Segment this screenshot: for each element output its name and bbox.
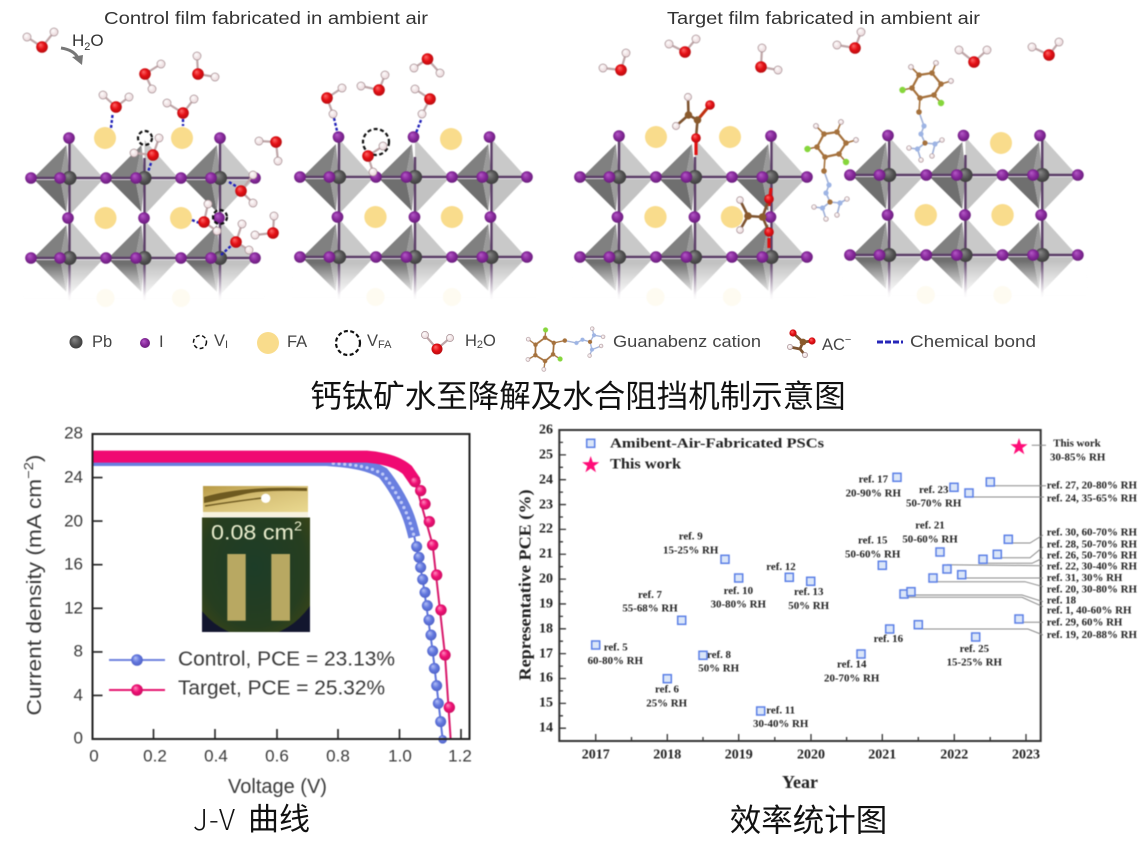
- y axis labels: 26: [539, 422, 553, 438]
- x axis labels: 2023: [1012, 748, 1040, 762]
- panel: target film lattice right: [833, 28, 1088, 304]
- x axis labels: 0.2: [143, 746, 167, 766]
- point labels: 30-80% RH: [711, 599, 767, 611]
- y axis labels: 25: [539, 448, 553, 462]
- legend: water: H: [465, 332, 477, 350]
- y axis labels: 24: [539, 472, 553, 488]
- point labels: 50-60% RH: [902, 533, 958, 545]
- x axis labels: 1.2: [448, 746, 472, 766]
- x axis labels: 0.6: [265, 746, 289, 766]
- heading: control film: Control film fabricated in ambient air: [104, 8, 428, 28]
- leader lines: [904, 445, 1046, 635]
- point labels: ref. 19, 20-88% RH: [1047, 629, 1137, 641]
- y axis title: ): [24, 454, 46, 462]
- point labels: 50-70% RH: [906, 498, 962, 510]
- molecule: acetate lower: [737, 188, 774, 248]
- y axis labels: 18: [539, 622, 553, 636]
- x axis title: Voltage (V): [228, 776, 327, 798]
- legend: This work: [610, 456, 682, 472]
- point labels: ref. 13: [794, 586, 824, 598]
- chart: J-V curve: [20, 424, 472, 798]
- point labels: ref. 25: [960, 643, 990, 655]
- legend: FA vacancy: [336, 331, 392, 355]
- data point: this work star: [1010, 438, 1028, 454]
- point labels: 50% RH: [698, 663, 740, 675]
- x axis labels: 0: [89, 746, 99, 766]
- x axis title: Year: [782, 772, 818, 792]
- caption: J-V curve: -: [209, 797, 219, 839]
- legend: Pb: Pb: [92, 333, 112, 351]
- point labels: ref. 10: [724, 585, 754, 597]
- point labels: ref. 31, 30% RH: [1047, 572, 1123, 584]
- curves: control and target: [93, 457, 455, 744]
- legend: water: 2: [477, 339, 483, 351]
- legend: target: Target, PCE = 25.32%: [178, 676, 385, 700]
- y axis title: −2: [20, 462, 36, 479]
- point labels: 60-80% RH: [588, 655, 644, 667]
- point labels: ref. 20, 30-80% RH: [1047, 583, 1137, 595]
- point labels: ref. 28, 50-70% RH: [1047, 538, 1137, 550]
- legend: guanabenz cation: Guanabenz cation: [613, 333, 761, 351]
- caption: J-V curve: V: [219, 797, 235, 839]
- x axis labels: 2022: [940, 748, 968, 762]
- y axis labels: [64, 424, 83, 748]
- y axis labels: 20: [539, 572, 553, 586]
- y axis labels: 16: [64, 554, 83, 574]
- legend: iodide vacancy: V: [214, 332, 225, 350]
- x axis labels: [582, 748, 1040, 762]
- plot frame and ticks: [92, 434, 470, 739]
- caption: J-V curve: J: [193, 797, 208, 839]
- label: H2O with arrow: O: [90, 31, 104, 50]
- x axis labels: 2020: [797, 748, 825, 762]
- title: mechanism schematic: 钙钛矿水至降解及水合阻挡机制示意图: [310, 378, 846, 414]
- y axis title: Current density (mA cm: [24, 507, 46, 716]
- legend: iodide vacancy: [194, 332, 228, 351]
- point labels: 15-25% RH: [663, 545, 719, 557]
- legend: water: O: [483, 332, 496, 350]
- point labels: ref. 21: [915, 520, 945, 532]
- data points: [592, 473, 1023, 715]
- point labels: 50-60% RH: [845, 548, 901, 560]
- panel: target film lattice left: [572, 35, 817, 306]
- point labels: 15-25% RH: [947, 657, 1003, 669]
- point labels: 20-90% RH: [846, 488, 902, 500]
- x axis labels: 2018: [653, 748, 681, 762]
- point labels: ref. 29, 60% RH: [1047, 616, 1123, 628]
- point labels: ref. 7: [638, 589, 663, 601]
- y axis labels: 20: [64, 512, 83, 530]
- y axis labels: 21: [539, 546, 553, 562]
- point labels: ref. 11: [766, 704, 795, 716]
- point labels: ref. 12: [766, 561, 796, 573]
- legend: acetate: −: [845, 334, 851, 346]
- legend: FA vacancy: FA: [378, 339, 392, 351]
- legend: acetate: [787, 329, 851, 358]
- y axis labels: 16: [539, 670, 553, 686]
- point labels: 25% RH: [646, 697, 688, 709]
- point labels: ref. 8: [707, 649, 732, 661]
- x axis labels: 0.4: [204, 746, 228, 766]
- x axis labels: 2019: [725, 748, 753, 762]
- legend: Amibent-Air-Fabricated PSCs: [610, 436, 825, 452]
- y axis labels: 23: [539, 498, 553, 512]
- label: H2O with arrow: H: [72, 31, 84, 50]
- plot frame and ticks: [559, 430, 1041, 741]
- point labels: ref. 9: [679, 531, 703, 543]
- molecule: guanabenz on lattice: [899, 60, 954, 162]
- point labels: ref. 26, 50-70% RH: [1047, 550, 1137, 562]
- y axis labels: 4: [74, 686, 83, 704]
- point labels: ref. 30, 60-70% RH: [1047, 527, 1137, 539]
- inset: device photo: 0.08 cm: [211, 521, 286, 544]
- legend: Pb: [70, 333, 112, 351]
- x axis labels: 2021: [868, 748, 896, 762]
- y axis labels: 14: [539, 720, 553, 736]
- legend: FA: FA: [287, 333, 307, 351]
- point labels: 20-70% RH: [824, 672, 880, 684]
- caption: efficiency statistics: 效率统计图: [730, 802, 887, 838]
- y axis labels: 24: [64, 468, 83, 486]
- legend: acetate: AC: [822, 336, 845, 354]
- point labels: ref. 6: [655, 683, 680, 695]
- point labels: ref. 15: [858, 535, 888, 547]
- point labels: ref. 24, 35-65% RH: [1047, 492, 1137, 504]
- legend: iodide vacancy: I: [225, 339, 228, 351]
- legend: species key: [70, 319, 1036, 374]
- legend: I: [140, 333, 164, 351]
- legend: water: [421, 331, 496, 354]
- point labels: ref. 23: [919, 484, 949, 496]
- caption: J-V curve: 曲线: [248, 794, 310, 839]
- point labels: 50% RH: [788, 600, 830, 612]
- legend: FA: [257, 332, 307, 354]
- panel: control film lattice right: [292, 53, 537, 306]
- label: H2O with arrow: 2: [84, 41, 90, 53]
- y axis labels: [539, 422, 553, 736]
- point labels: 55-68% RH: [622, 603, 678, 615]
- y axis labels: 8: [74, 642, 83, 660]
- label: H2O with arrow: [61, 31, 104, 65]
- legend: chemical bond: Chemical bond: [910, 333, 1036, 351]
- x axis labels: 1.0: [388, 746, 412, 766]
- y axis labels: 28: [64, 424, 83, 442]
- y axis labels: 12: [64, 598, 83, 618]
- y axis labels: 17: [539, 646, 553, 662]
- molecule: acetate upper: [672, 93, 715, 155]
- point labels: ref. 27, 20-80% RH: [1047, 479, 1137, 491]
- panel: control film lattice left: [23, 28, 282, 307]
- point labels: [588, 438, 1137, 730]
- molecule: guanabenz between lattices: [804, 120, 858, 221]
- y axis labels: 19: [539, 596, 553, 612]
- legend: FA vacancy: V: [367, 332, 378, 350]
- y axis title: Representative PCE (%): [516, 490, 534, 680]
- legend: [582, 436, 825, 472]
- inset: device photo: 2: [294, 518, 302, 533]
- point labels: ref. 5: [604, 641, 628, 653]
- point labels: ref. 17: [859, 474, 889, 486]
- y axis labels: 22: [539, 522, 553, 536]
- point labels: 30-85% RH: [1050, 451, 1106, 463]
- y axis labels: 15: [539, 696, 553, 710]
- point labels: ref. 22, 30-40% RH: [1047, 561, 1137, 573]
- legend: guanabenz cation: [522, 319, 761, 374]
- point labels: ref. 18: [1047, 594, 1077, 606]
- legend: I: I: [159, 333, 164, 351]
- point labels: ref. 14: [837, 658, 867, 670]
- point labels: ref. 16: [874, 633, 904, 645]
- point labels: ref. 1, 40-60% RH: [1047, 605, 1132, 617]
- inset: device photo: [201, 485, 311, 633]
- chart: efficiency statistics: [516, 422, 1137, 792]
- legend: control: Control, PCE = 23.13%: [178, 648, 395, 670]
- x axis labels: [89, 746, 472, 766]
- point labels: This work: [1053, 438, 1102, 450]
- heading: target film: Target film fabricated in ambient air: [667, 8, 980, 28]
- y axis labels: 0: [74, 728, 83, 748]
- x axis labels: 2017: [582, 748, 610, 762]
- x axis labels: 0.8: [326, 746, 350, 766]
- point labels: 30-40% RH: [753, 718, 809, 730]
